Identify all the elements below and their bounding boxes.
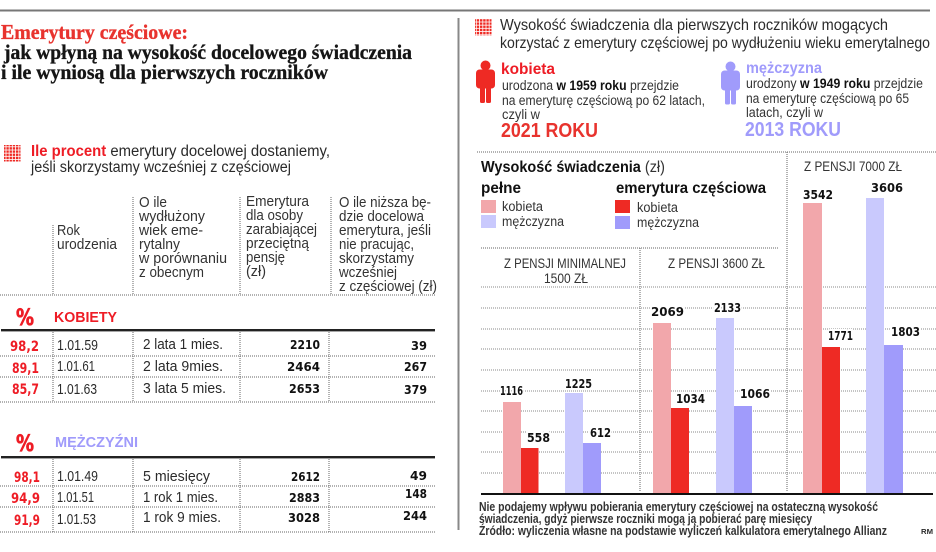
group heading: 3600: Z PENSJI 3600 ZŁ — [668, 256, 765, 271]
section: men: 2883 — [289, 491, 320, 505]
column headers: O ile — [139, 194, 167, 211]
legend: kobieta — [637, 200, 678, 215]
bars: 7000: 3542 — [803, 187, 833, 202]
bars: 7000 — [803, 180, 920, 493]
woman text: kobieta — [501, 61, 555, 78]
section: men: 1.01.53 — [57, 512, 96, 528]
man text: latach, czyli w — [746, 105, 823, 120]
column headers: wcześniej — [338, 264, 397, 281]
icon: dotted square — [4, 145, 20, 162]
section: women: 2464 — [287, 360, 320, 374]
title: Emerytury częściowe: — [1, 20, 188, 44]
bars: 3600: 1066 — [740, 386, 770, 401]
column headers: (zł) — [246, 263, 266, 280]
bars: 3600: 2069 — [651, 304, 684, 319]
section heading: KOBIETY — [54, 310, 117, 326]
section: women: 267 — [404, 360, 427, 374]
section: women: 1.01.61 — [57, 359, 95, 375]
footnote: świadczenia, gdyż pierwsze roczniki mogą ją pobierać parę miesięcy — [479, 512, 812, 526]
section heading: MĘŻCZYŹNI — [55, 434, 138, 451]
panel: first cohorts — [475, 17, 936, 538]
section: women: 89,1 — [12, 361, 39, 377]
woman text: czyli w — [502, 107, 540, 122]
legend: kobieta — [502, 199, 543, 214]
section: women — [1, 306, 435, 398]
section: men: 94,9 — [11, 491, 40, 507]
section: women: 2 lata 9mies. — [143, 359, 223, 375]
section: women: 2653 — [289, 382, 320, 396]
column headers: przeciętną — [246, 235, 310, 252]
man text: mężczyzna — [746, 60, 822, 77]
panel heading: Wysokość świadczenia dla pierwszych roczników mogących — [500, 17, 888, 34]
title: jak wpłyną na wysokość docelowego świadczenia — [3, 40, 412, 64]
group heading: minimum pay: 1500 ZŁ — [544, 271, 588, 286]
section: men — [1, 432, 435, 529]
column headers: w porównaniu — [138, 250, 227, 267]
group heading: 7000: Z PENSJI 7000 ZŁ — [804, 159, 902, 174]
legend: Wysokość świadczenia (zł) — [481, 159, 665, 176]
legend: pełne — [481, 180, 521, 197]
section: men: 244 — [403, 509, 427, 523]
bar chart — [481, 159, 936, 495]
section: women: 39 — [411, 339, 427, 353]
column headers: zarabiającej — [246, 221, 317, 238]
group heading: minimum pay — [504, 256, 626, 286]
column headers: z obecnym — [139, 264, 204, 281]
swatch: partial woman — [615, 200, 630, 213]
section: men: 1.01.51 — [57, 490, 94, 506]
column headers: wydłużony — [138, 208, 205, 225]
swatch: full woman — [481, 200, 496, 213]
column headers: dla osoby — [246, 207, 303, 224]
column headers: urodzenia — [57, 236, 118, 253]
column headers: rytalny — [139, 236, 180, 253]
bars: 7000: 3606 — [871, 180, 903, 195]
footnote: RM — [921, 529, 933, 536]
section: women: 3 lata 5 mies. — [143, 381, 226, 397]
column headers: Emerytura — [246, 193, 310, 210]
section: men: 1 rok 1 mies. — [143, 490, 218, 506]
bars: minimum pay: 1116 — [500, 383, 523, 398]
percent symbol: % — [16, 306, 34, 331]
column headers: emerytura, jeśli — [339, 222, 431, 239]
legend: mężczyzna — [637, 215, 699, 230]
section: men: 1 rok 9 mies. — [143, 510, 221, 526]
bars: 3600 — [651, 300, 770, 493]
column headers — [57, 193, 437, 295]
column headers: Rok — [57, 222, 80, 239]
legend: mężczyzna — [502, 214, 564, 229]
column headers: pensję — [246, 249, 285, 266]
section: men: 49 — [410, 469, 427, 483]
title: i ile wyniosą dla pierwszych roczników — [1, 60, 329, 84]
column headers: wiek eme- — [138, 222, 203, 239]
title — [1, 20, 412, 84]
column headers: nie pracując, — [339, 236, 414, 253]
legend — [481, 159, 766, 230]
woman text: 2021 ROKU — [501, 119, 598, 142]
section: women: 379 — [404, 383, 427, 397]
table heading — [30, 143, 330, 176]
swatch: full man — [481, 215, 496, 228]
section: women: 2210 — [290, 338, 320, 352]
section: men: 3028 — [288, 511, 320, 525]
column headers: dzie docelowa — [339, 208, 425, 225]
icon: woman — [476, 60, 495, 103]
bars: minimum pay: 612 — [590, 425, 611, 440]
column headers: skorzystamy — [339, 250, 414, 267]
woman text: na emeryturę częściową po 62 latach, — [502, 93, 705, 108]
table heading: Ile procent emerytury docelowej dostaniemy, — [31, 143, 330, 160]
bars: 3600: 1034 — [676, 391, 705, 406]
section: women: 1.01.59 — [57, 338, 98, 354]
woman text — [501, 61, 705, 142]
section: men: 91,9 — [14, 513, 40, 529]
column headers: O ile niższa bę- — [339, 194, 431, 211]
panel heading — [500, 17, 930, 52]
woman text: urodzona w 1959 roku przejdzie — [502, 78, 679, 93]
section: women: 85,7 — [12, 382, 39, 398]
column headers: z częściowej (zł) — [339, 278, 437, 295]
icon: man — [721, 62, 740, 104]
bars: 7000: 1803 — [891, 324, 920, 339]
panel: percent table — [0, 143, 437, 532]
man text — [745, 60, 923, 141]
bars: minimum pay: 1225 — [565, 376, 592, 391]
section: men: 5 miesięcy — [143, 469, 211, 485]
section: men: 1.01.49 — [57, 469, 98, 485]
section: women: 1.01.63 — [57, 382, 97, 398]
percent symbol: % — [16, 432, 34, 457]
bars: 7000: 1771 — [828, 328, 853, 343]
man text: urodzony w 1949 roku przejdzie — [746, 76, 923, 91]
swatch: partial man — [615, 216, 630, 229]
man text: 2013 ROKU — [745, 118, 841, 141]
bars: 3600: 2133 — [714, 300, 741, 315]
footnote — [479, 500, 933, 538]
section: men: 98,1 — [14, 470, 40, 486]
legend: emerytura częściowa — [616, 180, 766, 197]
group heading: minimum pay: Z PENSJI MINIMALNEJ — [504, 256, 626, 271]
man text: na emeryturę częściową po 65 — [746, 91, 909, 106]
bars: minimum pay: 558 — [527, 430, 550, 445]
section: men: 148 — [405, 487, 427, 501]
table heading: jeśli skorzystamy wcześniej z częściowej — [30, 159, 291, 176]
icon: dotted square — [475, 19, 492, 36]
section: men: 2612 — [291, 470, 320, 484]
section: women: 98,2 — [10, 339, 39, 355]
bars: minimum pay — [500, 376, 611, 493]
section: women: 2 lata 1 mies. — [143, 337, 223, 353]
